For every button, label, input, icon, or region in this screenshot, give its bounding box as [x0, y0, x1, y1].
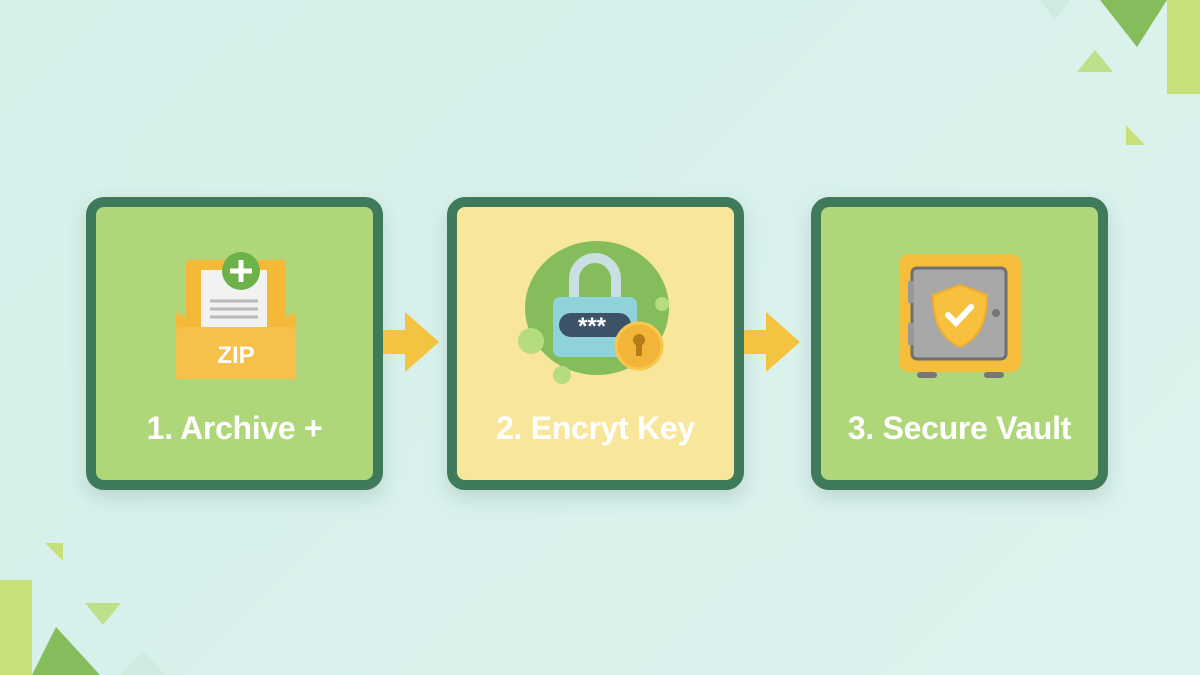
- icon: safe: [899, 254, 1021, 378]
- icon: lock: ***: [578, 313, 607, 340]
- panel: vault: [811, 197, 1108, 490]
- label: 1. Archive +: [147, 410, 322, 446]
- icon: zip: ZIP: [217, 342, 255, 369]
- arrow 2: [744, 312, 800, 372]
- arrow 1: [383, 312, 439, 372]
- panel: archive: [86, 197, 383, 490]
- panel: encrypt: [447, 197, 744, 490]
- icon: zip: [176, 252, 296, 379]
- label: 2. Encryt Key: [496, 410, 695, 446]
- icon: lock: [518, 241, 669, 384]
- label: 3. Secure Vault: [848, 410, 1071, 446]
